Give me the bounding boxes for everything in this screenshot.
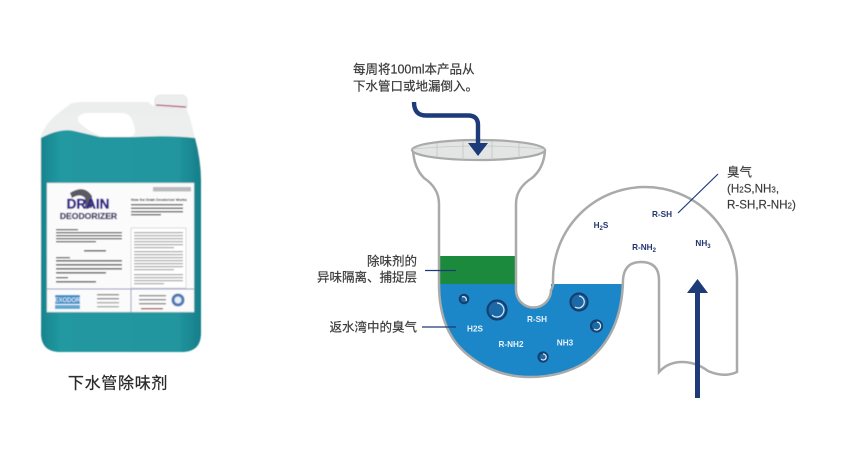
arrow: rising odor — [687, 279, 708, 398]
odor barrier layer — [440, 256, 516, 284]
odor labels in pipe: 2 — [600, 226, 604, 232]
odor callout: (H2S,NH3, — [727, 182, 779, 196]
product name: 下水管除味剂 — [68, 374, 168, 392]
drain trap diagram — [412, 102, 737, 398]
label footer: EXODOR — [54, 298, 81, 304]
barrier label — [317, 254, 417, 284]
barrier label: 除味剂的 — [367, 254, 417, 268]
odor labels in water: H2S — [467, 324, 483, 334]
label logo: DRAIN — [67, 196, 109, 212]
odor labels in pipe: 3 — [707, 244, 711, 250]
odor labels in pipe — [594, 210, 711, 254]
bottle label — [47, 183, 194, 312]
odor labels in pipe: 2 — [653, 248, 657, 254]
bottle cap — [155, 95, 187, 108]
label footer — [47, 289, 194, 312]
label logo — [60, 189, 118, 221]
trap odor label: 返水湾中的臭气 — [329, 320, 417, 334]
label right info box — [131, 228, 186, 288]
label right heading: How the Drain Deodorizer Works — [131, 198, 187, 202]
bottle body — [40, 102, 201, 352]
funnel rim strainer — [412, 140, 545, 160]
odor labels in water: R-NH2 — [498, 340, 524, 349]
bubbles — [460, 294, 602, 362]
water in trap — [440, 284, 623, 377]
leader line: trap odor — [422, 326, 456, 328]
blue-green liquid — [41, 130, 201, 352]
label left paragraphs — [56, 229, 122, 283]
barrier label: 异味隔离、捕捉层 — [317, 270, 417, 284]
odor labels in pipe: S — [603, 221, 609, 230]
leader line: odor — [678, 174, 718, 213]
product: drain deodorizer bottle — [40, 95, 201, 352]
arrow: pour in — [414, 102, 488, 156]
odor labels in water: NH3 — [557, 338, 574, 348]
instruction text: 每周将100ml本产品从 — [353, 62, 475, 76]
instruction text — [353, 62, 478, 94]
bottle handle opening — [78, 113, 135, 137]
leader line: barrier — [425, 270, 456, 272]
odor labels in water — [467, 315, 574, 349]
odor labels in pipe: NH — [695, 239, 707, 248]
odor callout — [727, 164, 796, 212]
pipe outline — [413, 150, 737, 377]
label logo: DEODORIZER — [60, 211, 118, 221]
odor labels in pipe: R-SH — [652, 210, 672, 219]
odor callout: 臭气 — [727, 164, 753, 180]
odor labels in pipe: R-NH — [632, 243, 653, 252]
odor labels in pipe: H — [594, 221, 600, 230]
instruction text: 下水管口或地漏倒入。 — [353, 78, 478, 94]
odor labels in water: R-SH — [527, 315, 547, 324]
odor callout: R-SH,R-NH2) — [727, 198, 796, 212]
label right heading — [131, 187, 191, 216]
